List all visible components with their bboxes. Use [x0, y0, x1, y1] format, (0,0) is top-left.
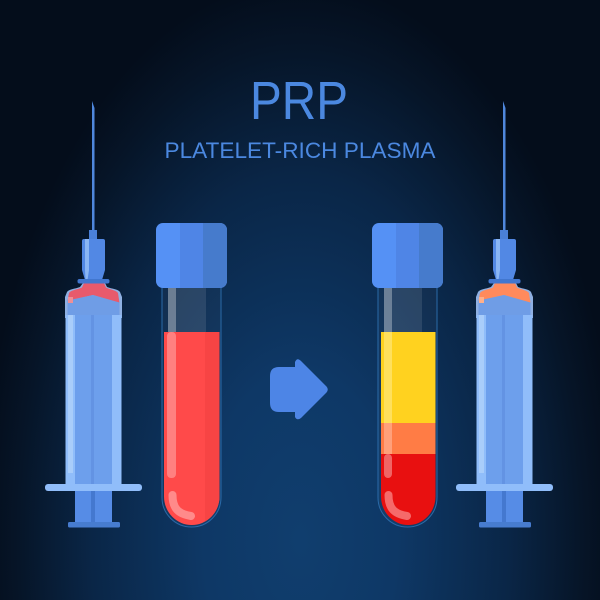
- barrel body: [66, 315, 122, 484]
- needle: [503, 101, 506, 231]
- cap: [372, 223, 443, 288]
- barrel body: [476, 315, 532, 484]
- orange fill in barrel: [478, 283, 530, 303]
- pink reflection: [68, 297, 73, 303]
- right tube: [372, 223, 443, 527]
- glass: [378, 286, 437, 527]
- red fill in barrel: [68, 283, 120, 303]
- hub: [89, 230, 97, 239]
- left tube: [156, 223, 227, 527]
- nozzle cone: [82, 239, 105, 280]
- plunger rod: [486, 491, 523, 523]
- cap: [156, 223, 227, 288]
- plunger inside barrel: [486, 315, 523, 484]
- finger flange: [456, 484, 553, 491]
- plunger inside barrel: [75, 315, 112, 484]
- plunger rod: [75, 491, 112, 523]
- separated layers: [381, 332, 436, 526]
- arrow: [270, 359, 328, 419]
- glare: [388, 495, 407, 516]
- title: PRP: [250, 71, 348, 131]
- glare: [172, 495, 191, 516]
- barrel highlight: [479, 315, 484, 473]
- cone highlight: [85, 239, 89, 280]
- plunger base: [68, 522, 120, 528]
- peach reflection: [479, 297, 484, 303]
- nozzle cone: [493, 239, 516, 280]
- right syringe: [456, 101, 553, 528]
- needle: [92, 101, 94, 231]
- cone highlight: [496, 239, 500, 280]
- nozzle flange: [78, 279, 110, 284]
- barrel outline: [65, 283, 122, 318]
- barrel highlight: [68, 315, 73, 473]
- hub: [500, 230, 508, 239]
- subtitle: PLATELET-RICH PLASMA: [164, 138, 436, 163]
- piston head: [68, 295, 120, 315]
- left syringe: [45, 101, 142, 528]
- barrel outline: [476, 283, 533, 318]
- piston head: [478, 295, 530, 315]
- plunger base: [479, 522, 531, 528]
- blood: [164, 332, 220, 527]
- finger flange: [45, 484, 142, 491]
- nozzle flange: [488, 279, 520, 284]
- glass: [162, 286, 221, 527]
